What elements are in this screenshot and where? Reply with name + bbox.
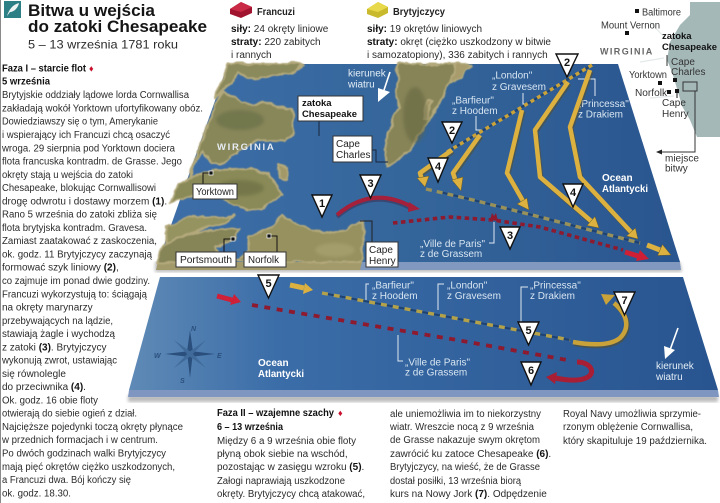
ship names upper: z Drakiem	[578, 110, 623, 120]
text block: phase II, column 2: zawrócić ku zatoce Chesapeake (6).	[390, 449, 551, 460]
paragraph: phase I: stawiają żagle i wychodzą	[2, 329, 115, 340]
marker 2: 2	[449, 125, 455, 137]
inset locator map: miejsce	[665, 154, 699, 164]
panel: lower map, 6-13 September	[128, 275, 719, 402]
text block: phase II, column 1	[217, 408, 365, 500]
inset locator map: Chesapeake	[662, 42, 717, 53]
marker 1: 1	[319, 198, 325, 210]
label: zatoka Chesapeake: zatoka	[302, 98, 332, 109]
paragraph: phase I: Dowiedziawszy się o tym, Amerykanie	[2, 117, 158, 128]
marker 2 top	[556, 54, 578, 77]
marker 3 lower	[500, 227, 520, 249]
heading: phase I: Faza I – starcie flot	[2, 64, 87, 74]
marker 5 right	[518, 322, 539, 345]
British fleet arrows upper	[417, 70, 671, 256]
text block: phase II, column 3: który skapituluje 19 października.	[563, 436, 707, 447]
arrow: French fleet course	[217, 294, 241, 305]
arrow: British fleet course	[290, 283, 313, 294]
marker 1	[312, 195, 332, 217]
text block: phase II, column 1: 6 – 13 września	[217, 422, 283, 433]
arrow: battle location pointer	[656, 91, 695, 154]
label: Cape Charles	[333, 136, 388, 162]
icon: compass rose: S	[180, 378, 185, 385]
paragraph: phase I: Chesapeake, blokując Cornwallisowi	[2, 183, 156, 194]
ship names upper: „Ville de Paris"	[420, 239, 486, 250]
paragraph: phase I: się równolegle	[2, 369, 66, 380]
label: Ocean Atlantycki lower: Ocean	[258, 358, 289, 369]
marker 2	[442, 122, 462, 143]
paragraph: phase I: Ok. godz. 16 obie floty	[2, 395, 98, 406]
legend: French fleet	[230, 2, 329, 61]
ship names upper	[420, 70, 629, 260]
legend: British fleet	[367, 2, 551, 61]
paragraph: phase I: na okręty marynarzy	[2, 302, 93, 314]
marker 5 left	[258, 275, 279, 298]
title: do zatoki Chesapeake	[28, 17, 207, 36]
label: Norfolk: Norfolk	[248, 255, 280, 266]
paragraph: phase I: otwierają do siebie ogień z dział.	[2, 409, 137, 420]
text block: phase II, column 1: płyną obok siebie na wschód,	[217, 449, 348, 460]
inset locator map: Charles	[671, 67, 705, 78]
paragraph: phase I: i wspierający ich Francuzi chcą osaczyć	[2, 130, 170, 141]
label: Ocean Atlantycki upper	[602, 173, 648, 195]
label: Portsmouth	[176, 237, 236, 267]
ship names lower: z Gravesem	[447, 291, 501, 302]
marker 2 top: 2	[564, 57, 570, 69]
label: Ocean Atlantycki upper: Atlantycki	[602, 184, 648, 195]
French fleet line upper	[393, 213, 623, 250]
French fleet line lower	[252, 305, 567, 360]
icon: compass rose	[154, 326, 222, 385]
ship names upper: „London"	[492, 70, 533, 82]
text block: phase II, column 2: dostał posiłki, 13 września biorą	[390, 476, 521, 487]
ship names upper: „Princessa"	[578, 99, 629, 110]
paragraph: phase I: z zatoki (3). Brytyjczycy	[2, 342, 106, 353]
paragraph: phase I: a Francuzi dwa. Bój kończy się	[2, 475, 131, 486]
label: Cape Charles: Cape	[336, 139, 360, 150]
marker 4 right	[563, 184, 583, 207]
paragraph: phase I	[1, 90, 203, 499]
text block: phase II, column 2: wiatr. Wreszcie nocą z 9 września	[389, 422, 534, 433]
inset locator map: Cape	[662, 98, 686, 109]
panel: upper map, battle of 5 September	[155, 54, 682, 272]
legend: French fleet: Francuzi	[257, 7, 295, 18]
land masses	[158, 64, 470, 262]
legend: British fleet: straty: okręt (ciężko uszkodzony w bitwie	[367, 37, 551, 48]
marker 4 right: 4	[570, 187, 577, 199]
text block: phase II, column 2: kurs na Nowy Jork (7). Odpędzenie	[390, 489, 547, 500]
arrow: French turn back	[546, 362, 592, 384]
label: Ocean Atlantycki lower: Atlantycki	[258, 369, 304, 380]
paragraph: phase I: flota brytyjska kontradm. Gravesa.	[2, 223, 147, 234]
inset locator map: Norfolk	[635, 88, 668, 99]
ship names lower: „Princessa"	[530, 280, 581, 292]
label: zatoka Chesapeake	[298, 96, 363, 136]
label: zatoka Chesapeake: Chesapeake	[302, 109, 357, 120]
inset locator map: Baltimore	[642, 8, 681, 18]
paragraph: phase I: formować szyk liniowy (2),	[2, 263, 119, 274]
paragraph: phase I: w przednich formacjach i w centrum.	[1, 435, 158, 446]
heading: phase I: 5 września	[2, 76, 50, 88]
text block: phase II, column 3	[563, 409, 707, 447]
arrow: French fleet upper	[625, 250, 649, 261]
inset locator map: Cape	[671, 57, 695, 68]
label: Cape Charles: Charles	[336, 150, 370, 161]
legend: French fleet: straty: 220 zabitych	[231, 37, 321, 48]
text block: phase II, column 2: de Grasse nakazuje swym okrętom	[390, 435, 540, 446]
text block: phase II, column 1: ♦	[338, 408, 343, 418]
icon: red block	[230, 2, 252, 18]
paragraph: phase I: Rano 5 września do zatoki zbliża się	[2, 210, 157, 221]
legend: French fleet: i rannych	[231, 50, 272, 61]
label: Cape Henry: Cape	[369, 245, 393, 256]
paragraph: phase I: do przeciwnika (4).	[2, 382, 86, 393]
paragraph: phase I: flota francuska kontradm. de Grasse. Jego	[2, 157, 182, 168]
text block: phase II, column 2	[389, 409, 551, 500]
label: Cape Henry: Henry	[369, 256, 396, 267]
paragraph: phase I: ok. godz. 18.30.	[2, 488, 71, 499]
paragraph: phase I: Najcięższe pojedynki toczą okręty płynące	[2, 422, 183, 433]
text block: phase II, column 2: Brytyjczycy, na wieść, że de Grasse	[390, 462, 540, 473]
icon: yellow block	[367, 2, 388, 18]
icon: compass rose: N	[191, 326, 197, 333]
arrow: wind direction lower: wiatru	[655, 372, 683, 383]
inset locator map: bitwy	[665, 164, 688, 174]
arrow: wind direction upper: wiatru	[347, 80, 375, 90]
inset locator map	[600, 2, 720, 174]
title: Bitwa u wejścia	[28, 1, 156, 20]
legend: British fleet: siły: 19 okrętów liniowych	[367, 24, 482, 35]
marker 6: 6	[528, 365, 534, 377]
text block: phase II, column 1: pozostając w zasięgu wzroku (5).	[217, 462, 364, 473]
marker 3	[360, 175, 381, 198]
bay and ocean water	[158, 64, 680, 262]
marker 4 left	[428, 158, 448, 182]
inset locator map: Yorktown	[629, 70, 667, 81]
ship names lower: z Drakiem	[530, 291, 575, 302]
marker 4 left: 4	[435, 161, 442, 173]
British fleet line upper	[426, 65, 640, 243]
paragraph: phase I: wykonują zwrot, ustawiając	[1, 356, 117, 367]
British fleet line lower	[322, 293, 570, 340]
label: Yorktown	[193, 171, 237, 199]
paragraph: phase I: zakładają wokół Yorktown ufortyfikowany obóz.	[2, 104, 203, 114]
text block: phase II, column 3: Royal Navy umożliwia sprzymie-	[563, 409, 701, 420]
paragraph: phase I: przebywających na lądzie,	[2, 316, 113, 327]
paragraph: phase I: Zamiast zaatakować z zaskoczenia,	[2, 236, 157, 247]
paragraph: phase I: Brytyjskie oddziały lądowe lorda Cornwallisa	[2, 90, 189, 101]
arrow: wind direction lower	[655, 328, 695, 383]
label: Yorktown: Yorktown	[196, 187, 234, 198]
ship names lower: „London"	[447, 280, 488, 292]
ship names lower: z de Grassem	[405, 368, 467, 378]
text block: phase II, column 1: Między 6 a 9 września obie floty	[217, 436, 356, 447]
ship names lower: „Ville de Paris"	[405, 358, 471, 368]
ocean water lower	[129, 277, 718, 390]
heading: phase I: ♦	[89, 64, 94, 74]
arrow: French exit from bay	[337, 198, 420, 217]
battle location box	[683, 82, 697, 91]
paragraph: phase I: Po dwóch godzinach walki Brytyjczycy	[2, 448, 166, 460]
title	[28, 1, 207, 36]
marker 3 lower: 3	[507, 230, 513, 242]
arrow: wind direction upper: kierunek	[348, 68, 387, 80]
ship names lower: „Barfieur"	[372, 280, 414, 292]
ship names lower: z Hoodem	[372, 291, 418, 302]
arrow: wind direction upper	[347, 68, 390, 102]
subtitle: dates: 5 – 13 września 1781 roku	[28, 38, 178, 52]
ship names upper: z Hoodem	[452, 106, 498, 117]
label: Norfolk	[244, 234, 286, 267]
ship names upper: z Gravesem	[492, 82, 546, 93]
paragraph: phase I: Francuzi wykorzystują to: ściągają	[2, 289, 147, 300]
paragraph: phase I: wroga. 29 sierpnia pod Yorktown dociera	[1, 143, 175, 154]
arrow: British course to New York	[573, 294, 627, 346]
label: WIRGINIA: WIRGINIA	[217, 142, 275, 153]
inset locator map: zatoka	[662, 31, 692, 42]
arrow: wind direction lower: kierunek	[656, 361, 695, 372]
inset locator map: Henry	[662, 109, 689, 120]
ship names upper: z de Grassem	[420, 249, 482, 260]
text block: phase II, column 1: okręty. Brytyjczycy chcą atakować,	[217, 489, 365, 500]
marker 6	[521, 362, 541, 385]
legend: French fleet: siły: 24 okręty liniowe	[231, 24, 329, 35]
paragraph: phase I: ok. godz. 11 Brytyjczycy zaczynają	[2, 249, 152, 260]
marker 3: 3	[367, 178, 374, 190]
inset locator map: WIRGINIA	[600, 46, 654, 56]
label: Ocean Atlantycki lower	[258, 358, 304, 380]
label: Cape Henry	[360, 221, 398, 267]
marker 5 left: 5	[265, 278, 272, 290]
label: Ocean Atlantycki upper: Ocean	[602, 173, 633, 184]
icon: quill emblem	[4, 1, 21, 18]
legend: British fleet: Brytyjczycy	[393, 7, 445, 18]
marker 5 right: 5	[525, 325, 532, 337]
marker 7	[614, 292, 635, 315]
paragraph: phase I: drogę odwrotu i dostawy morzem (1).	[2, 196, 167, 207]
icon: compass rose: W	[154, 353, 162, 360]
ship names lower	[366, 280, 581, 378]
label: Portsmouth: Portsmouth	[180, 255, 232, 266]
text block: phase II, column 1: Załogi naprawiają uszkodzone	[217, 476, 345, 487]
legend: British fleet: i samozatopiony), 336 zabitych i rannych	[367, 50, 548, 61]
inset locator map: Mount Vernon	[601, 20, 660, 32]
text block: phase II, column 1: Faza II – wzajemne szachy	[217, 408, 334, 419]
text block: phase I	[1, 64, 203, 499]
text block: phase II, column 2: ale uniemożliwia im to niekorzystny	[390, 409, 541, 420]
paragraph: phase I: okręty stają u wejścia do zatoki	[2, 170, 133, 181]
ship names upper: „Barfieur"	[452, 96, 494, 106]
text block: phase II, column 3: rzonym oblężenie Cornwallisa,	[563, 422, 693, 433]
heading: phase I	[2, 64, 94, 88]
paragraph: phase I: mają pięć okrętów ciężko uszkodzonych,	[2, 462, 175, 473]
icon: compass rose: E	[217, 353, 222, 360]
paragraph: phase I: co zajmuje im ponad dwie godziny.	[2, 276, 150, 287]
land relief shading	[216, 87, 427, 257]
marker 7: 7	[621, 295, 628, 307]
